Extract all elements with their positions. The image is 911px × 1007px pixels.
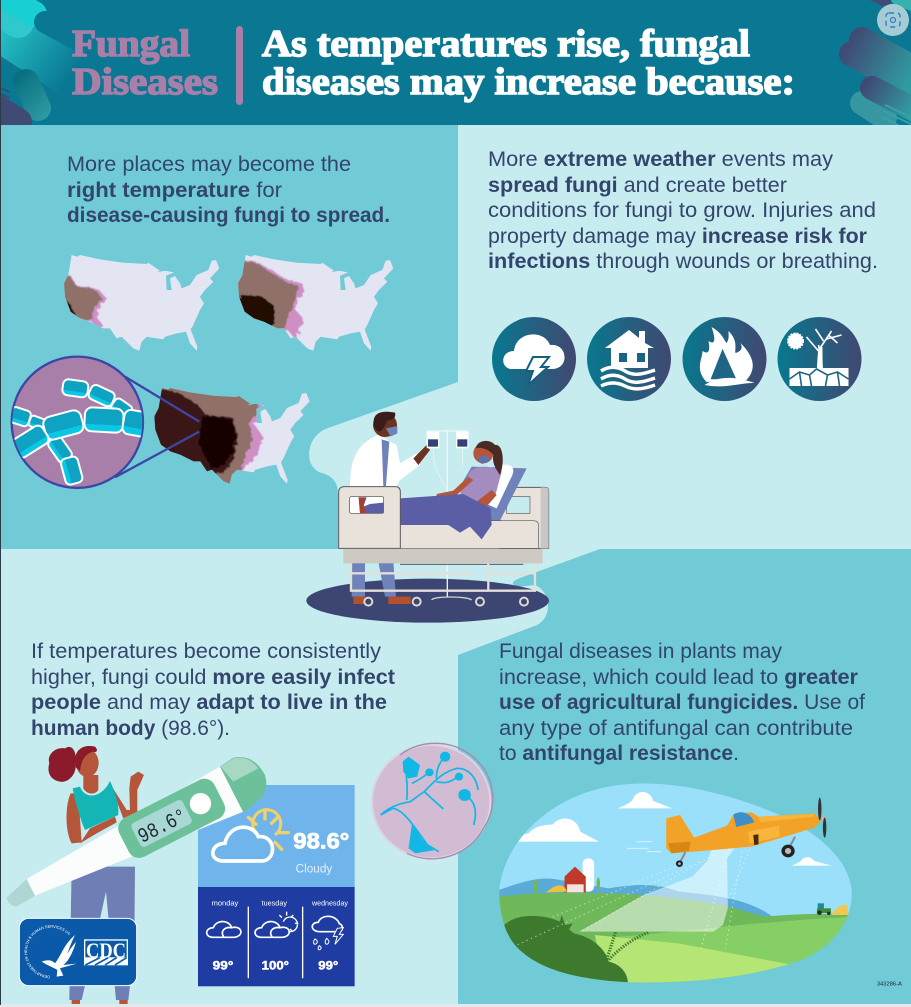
forecast: wednesday: 99° bbox=[318, 958, 339, 972]
forecast: tuesday: 100° bbox=[262, 958, 289, 972]
footboard bbox=[339, 487, 400, 548]
HHS seal text bbox=[24, 925, 70, 978]
IV stand with bags bbox=[427, 430, 469, 597]
title: headline bbox=[262, 23, 795, 103]
text block: adapting to body temperature: people and may adapt to live in the bbox=[31, 691, 387, 714]
tractor bbox=[817, 903, 849, 915]
forecast: monday bbox=[207, 898, 241, 972]
forecast: monday: 99° bbox=[213, 958, 234, 972]
wheels bbox=[364, 597, 528, 606]
icon: storm bbox=[492, 317, 576, 401]
text block: agricultural fungicides: any type of antifungal can contribute bbox=[499, 717, 853, 740]
floor shadow bbox=[306, 579, 549, 623]
header swooshes bbox=[0, 0, 911, 126]
text block: extreme weather: More extreme weather events may bbox=[488, 148, 834, 171]
text block: agricultural fungicides: to antifungal resistance. bbox=[499, 742, 739, 765]
panel: top-left teal background bbox=[0, 125, 458, 549]
text block: extreme weather bbox=[488, 148, 878, 273]
map: medium spread bbox=[233, 255, 393, 351]
blanket bbox=[363, 494, 492, 539]
lens connector lines bbox=[115, 377, 199, 477]
map: small spread bbox=[59, 255, 219, 351]
document number: 343286-A bbox=[877, 981, 903, 987]
headboard bbox=[500, 487, 549, 548]
HHS eagle bbox=[42, 935, 77, 977]
text block: agricultural fungicides bbox=[499, 640, 865, 765]
text block: extreme weather: conditions for fungi to grow. Injuries and bbox=[488, 199, 876, 222]
barn bbox=[534, 858, 600, 893]
text block: temperature range: right temperature for bbox=[67, 179, 282, 202]
panel: bottom-right teal background bbox=[458, 549, 911, 1005]
fields bbox=[499, 893, 856, 988]
thermometer bbox=[7, 757, 266, 907]
text block: temperature range bbox=[67, 153, 390, 227]
text block: agricultural fungicides: Fungal diseases in plants may bbox=[499, 640, 782, 663]
text block: temperature range: disease-causing fungi to spread. bbox=[67, 204, 390, 227]
lens circle bbox=[12, 357, 143, 488]
map: large spread bbox=[154, 388, 310, 484]
icon: sun behind cloud bbox=[213, 810, 288, 861]
CDC mark: CDC bbox=[86, 941, 126, 963]
text block: adapting to body temperature: If temperatures become consistently bbox=[31, 640, 382, 663]
title: headline: diseases may increase because: bbox=[262, 61, 795, 103]
logo: HHS and CDC bbox=[18, 918, 138, 986]
illustration: petri dish with fungus bbox=[372, 743, 493, 859]
title: topic bbox=[72, 23, 218, 103]
forecast: monday: monday bbox=[212, 898, 239, 907]
text block: agricultural fungicides: use of agricultural fungicides. Use of bbox=[499, 691, 865, 714]
forecast: wednesday bbox=[311, 898, 348, 972]
plane bbox=[627, 798, 827, 867]
page edge bbox=[0, 1004, 911, 1007]
text block: temperature range: More places may become the bbox=[67, 153, 351, 176]
title divider bbox=[236, 26, 243, 105]
text block: adapting to body temperature: higher, fungi could more easily infect bbox=[31, 666, 395, 689]
text block: extreme weather: property damage may increase risk for bbox=[488, 225, 867, 248]
patient bbox=[437, 441, 527, 521]
thermometer: 98.6° bbox=[135, 805, 191, 849]
forecast: wednesday: wednesday bbox=[311, 898, 348, 907]
icon: image search badge bbox=[877, 4, 909, 36]
icon: flood bbox=[587, 317, 671, 401]
icon: drought bbox=[778, 317, 862, 401]
title: topic: Diseases bbox=[72, 61, 218, 103]
illustration: doctor and patient in hospital bed bbox=[306, 412, 549, 623]
wheat bbox=[606, 932, 649, 962]
text block: agricultural fungicides: increase, which could lead to greater bbox=[499, 666, 858, 689]
bed frame bbox=[351, 563, 535, 591]
text block: adapting to body temperature bbox=[31, 640, 395, 740]
mattress bbox=[400, 521, 539, 548]
forecast: tuesday bbox=[255, 898, 298, 972]
text block: extreme weather: spread fungi and create better bbox=[488, 174, 787, 197]
icon: wildfire bbox=[682, 317, 766, 401]
fungal hyphae cells bbox=[8, 379, 152, 486]
bed base bbox=[343, 549, 543, 563]
text block: adapting to body temperature: human body (98.6°). bbox=[31, 717, 230, 740]
condition label: Cloudy bbox=[296, 861, 332, 875]
HHS seal text: DEPARTMENT OF HEALTH & HUMAN SERVICES USA bbox=[24, 925, 70, 978]
current temperature: 98.6° bbox=[293, 828, 349, 853]
header banner bbox=[0, 0, 911, 126]
distant hills bbox=[499, 878, 772, 917]
text block: extreme weather: infections through wounds or breathing. bbox=[488, 250, 878, 273]
spray plume bbox=[579, 848, 734, 932]
icon: magnifier lens with fungal cells bbox=[8, 357, 199, 488]
doctor bbox=[350, 412, 430, 604]
foreground bush bbox=[503, 916, 628, 983]
forecast: tuesday: tuesday bbox=[262, 898, 287, 907]
illustration: crop duster over farm field bbox=[497, 782, 903, 988]
page left edge bbox=[0, 0, 1, 1005]
title: topic: Fungal bbox=[72, 23, 190, 65]
illustration: weather forecast card bbox=[198, 785, 355, 986]
illustration: woman with thermometer bbox=[7, 746, 266, 1004]
clouds bbox=[518, 818, 599, 842]
title: headline: As temperatures rise, fungal bbox=[262, 23, 750, 65]
woman bbox=[48, 746, 144, 1004]
